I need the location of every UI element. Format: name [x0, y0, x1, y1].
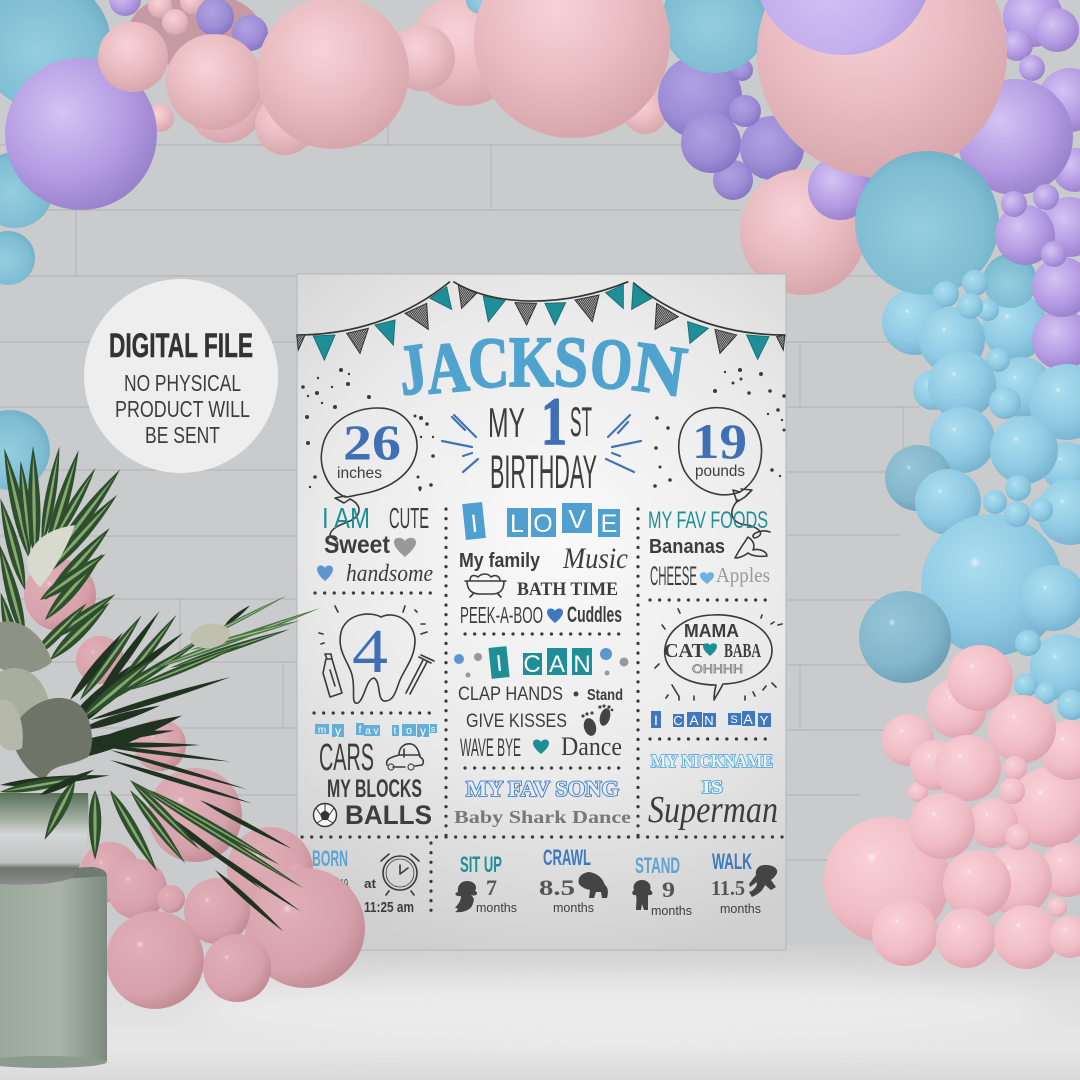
panel: speech bubble: BABA [724, 640, 761, 662]
frond: lower right [39, 743, 305, 933]
panel: i love: I [469, 510, 479, 538]
panel: favourite toys: f [359, 725, 362, 736]
i can say tiles: Y [760, 713, 769, 728]
icon: toothbrush [406, 655, 434, 694]
digital file badge: PRODUCT WILL [115, 396, 250, 422]
panel: my fav song: MY FAV SONG [466, 776, 619, 801]
panel: tooth count [319, 606, 434, 703]
panel: favourite foods: Apples [716, 563, 770, 587]
balloon cluster: bottom right pink [824, 645, 1080, 969]
balloon arch: top and right clusters [0, 0, 1080, 720]
panel: i can: Dance [561, 732, 622, 761]
panel: favourite toys: y [420, 724, 426, 738]
panel: favourite foods: CHEESE [650, 561, 697, 591]
bunting [297, 282, 785, 360]
panel: i am [317, 503, 433, 587]
balloon: 19 pounds: 19 [692, 413, 747, 469]
panel: crawl milestone: CRAWL [543, 845, 591, 870]
name: JACKSON: J [393, 328, 432, 411]
heading: my 1st birthday [488, 383, 597, 498]
panel: tooth count: 4 [352, 618, 388, 686]
panel: favourite toys: s [431, 724, 436, 734]
panel: my fav song: Baby Shark Dance [454, 807, 631, 827]
name: JACKSON: N [629, 326, 691, 412]
panel: sit up milestone: months [476, 900, 517, 915]
icon: soccer ball [314, 804, 336, 826]
panel: i can: CLAP HANDS [458, 684, 563, 705]
panel: i can: I [495, 650, 504, 676]
calla flower [27, 525, 75, 587]
i can say tiles: A [743, 711, 753, 727]
panel: favourite toys: MY BLOCKS [327, 775, 422, 803]
balloon: 26 inches: inches [337, 465, 382, 482]
name: JACKSON: S [553, 321, 589, 403]
panel: speech bubble [648, 609, 782, 831]
panel: favourite toys: a [365, 726, 371, 737]
panel: speech bubble: MY NICKNAME [651, 751, 773, 771]
panel: speech bubble: IS [702, 777, 723, 797]
icon: toy car [387, 744, 423, 767]
panel: i love: O [533, 510, 553, 538]
balloon arch: back layer [0, 0, 1080, 490]
panel: favourite toys: y [335, 724, 341, 738]
panel: i can [454, 646, 628, 762]
i can say tiles [651, 711, 771, 728]
balloon: 26 inches [321, 408, 417, 547]
panel: i love: My family [459, 550, 541, 572]
sun rays [442, 415, 641, 472]
panel: crawl milestone: 8.5 [539, 875, 575, 900]
panel: i am: handsome [346, 561, 433, 587]
heading: my 1st birthday: ST [570, 398, 592, 445]
panel: speech bubble: OHHHH [692, 662, 743, 676]
digital file badge [84, 279, 278, 473]
icon: bathtub [465, 574, 506, 597]
panel: birth time: 11:25 am [364, 899, 414, 916]
frond: centre mass [54, 609, 231, 767]
icon: baby feet [581, 704, 613, 737]
panel: sit up milestone: 7 [486, 875, 497, 900]
i can say tiles: A [689, 712, 699, 728]
panel: birth time: BORN [312, 846, 348, 871]
panel: speech bubble: MAMA [684, 621, 739, 641]
icon: banana [735, 537, 767, 558]
digital file badge: BE SENT [145, 422, 220, 448]
panel: i love [459, 502, 628, 628]
panel: i can: C [523, 651, 541, 678]
panel: favourite toys: o [406, 725, 412, 737]
plant: palm fronds [0, 446, 321, 933]
panel: i love: L [510, 510, 524, 538]
panel: walk milestone: months [720, 901, 761, 916]
name: JACKSON: K [509, 322, 554, 402]
balloon: 19 pounds: pounds [695, 463, 745, 480]
panel: stand milestone [632, 853, 692, 918]
panel: i am: I AM [322, 503, 370, 535]
panel: favourite toys: CARS [319, 737, 374, 779]
frond: top fan [0, 446, 125, 672]
digital file badge: DIGITAL FILE [109, 327, 253, 365]
panel: my fav song [454, 776, 631, 827]
panel: speech bubble: CAT [664, 640, 706, 662]
dark base leaves above bowl [0, 766, 110, 798]
panel: favourite toys: v [374, 726, 378, 737]
panel: crawl milestone: months [553, 900, 594, 915]
panel: i love: V [568, 504, 586, 534]
panel: favourite toys: BALLS [345, 800, 432, 830]
i can say tiles: I [654, 712, 658, 728]
icon: alarm clock [381, 854, 419, 895]
panel: birth time [312, 846, 419, 916]
frond: long right [129, 594, 321, 693]
panel: i love: PEEK-A-BOO [460, 602, 543, 628]
i can say tiles: N [704, 713, 714, 728]
panel: favourite foods: Bananas [649, 536, 725, 558]
panel: walk milestone: WALK [712, 849, 752, 874]
pot: glass bowl and green cylinder [0, 793, 107, 1068]
panel: i love: Music [562, 542, 628, 575]
panel: favourite toys: t [394, 726, 397, 737]
balloon cluster: bottom left pink [24, 559, 365, 1009]
panel: i can: Stand [587, 687, 623, 704]
panel: walk milestone [711, 849, 777, 916]
name: JACKSON: A [423, 326, 472, 410]
panel: birth time: 19. [340, 876, 350, 891]
i can say tiles: S [730, 714, 738, 726]
bud [188, 621, 232, 651]
panel: stand milestone: months [651, 903, 692, 918]
panel: i can: A [549, 651, 565, 678]
heading: my 1st birthday: MY [488, 399, 525, 446]
dotted dividers [302, 509, 785, 918]
pale flower leaves [0, 621, 92, 780]
confetti dots [301, 368, 786, 491]
panel: i am: CUTE [389, 503, 429, 535]
milestone board: BIRTHDAY [490, 445, 597, 498]
panel: speech bubble: Superman [648, 789, 778, 831]
floor [0, 945, 1080, 1080]
name: JACKSON: C [467, 322, 510, 404]
panel: sit up milestone [455, 852, 517, 915]
panel: favourite toys [314, 723, 437, 830]
panel: crawl milestone [539, 845, 608, 915]
panel: stand milestone: 9 [662, 877, 675, 902]
name: JACKSON [393, 321, 691, 412]
name: JACKSON: O [588, 323, 635, 405]
panel: favourite toys: m [318, 725, 326, 736]
panel: i love: Cuddles [567, 602, 622, 627]
panel: stand milestone: STAND [635, 853, 680, 878]
i can say tiles: C [673, 713, 683, 728]
panel: i can: GIVE KISSES [466, 711, 567, 732]
panel: favourite foods: MY FAV FOODS [648, 507, 768, 534]
icon: toothpaste [323, 654, 342, 697]
balloon: 19 pounds [679, 408, 770, 538]
panel: i love: BATH TIME [517, 579, 618, 600]
panel: i can: WAVE BYE [460, 734, 521, 762]
panel: birth time: at [364, 876, 377, 891]
balloon: 26 inches: 26 [343, 414, 401, 470]
panel: i love: E [601, 510, 617, 538]
panel: i can: N [573, 651, 591, 678]
digital file badge: NO PHYSICAL [124, 370, 241, 396]
panel: i am: Sweet [324, 531, 391, 559]
heading: my 1st birthday: 1 [541, 383, 567, 459]
panel: favourite foods [648, 507, 770, 591]
panel: walk milestone: 11.5 [711, 876, 745, 900]
panel: sit up milestone: SIT UP [460, 852, 502, 877]
milestone board [297, 274, 786, 950]
